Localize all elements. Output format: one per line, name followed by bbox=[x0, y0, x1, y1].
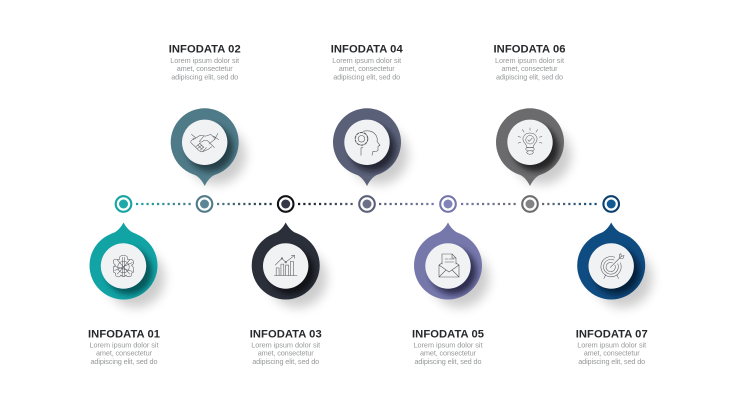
icon: bar chart bbox=[274, 256, 297, 276]
timeline node 5 bbox=[440, 196, 456, 212]
label: infodata 07: amet, consectetur bbox=[584, 349, 640, 358]
label: infodata 04: adipiscing elit, sed do bbox=[333, 72, 400, 82]
label: infodata 05: amet, consectetur bbox=[420, 349, 477, 358]
timeline node 6 bbox=[522, 196, 538, 212]
label: infodata 02: INFODATA 02 bbox=[169, 44, 241, 56]
label: infodata 05: Lorem ipsum dolor sit bbox=[414, 340, 482, 350]
icon: light bulb bbox=[518, 128, 542, 154]
label: infodata 01 bbox=[88, 328, 160, 366]
label: infodata 04: INFODATA 04 bbox=[331, 44, 403, 56]
timeline node 3 bbox=[278, 196, 294, 212]
label: infodata 06: adipiscing elit, sed do bbox=[496, 72, 563, 82]
label: infodata 07: adipiscing elit, sed do bbox=[578, 357, 645, 366]
timeline bbox=[116, 196, 619, 212]
label: infodata 07: INFODATA 07 bbox=[576, 328, 648, 340]
label: infodata 04: amet, consectetur bbox=[339, 64, 395, 73]
timeline node 1 bbox=[116, 196, 131, 212]
timeline node 7 bbox=[603, 196, 619, 212]
pin 5: periwinkle bbox=[414, 222, 489, 308]
label: infodata 01: adipiscing elit, sed do bbox=[90, 357, 158, 366]
label: infodata 02 bbox=[169, 44, 241, 82]
label: infodata 05: adipiscing elit, sed do bbox=[414, 357, 482, 366]
pin 2: slate teal bbox=[171, 108, 246, 186]
label: infodata 04: Lorem ipsum dolor sit bbox=[332, 56, 401, 65]
icon: atom gear bbox=[113, 255, 134, 277]
label: infodata 01: amet, consectetur bbox=[96, 349, 153, 358]
label: infodata 07 bbox=[576, 328, 648, 366]
label: infodata 02: amet, consectetur bbox=[177, 64, 233, 73]
label: infodata 05 bbox=[412, 328, 484, 366]
label: infodata 02: adipiscing elit, sed do bbox=[171, 72, 238, 82]
pin 1: teal bbox=[90, 222, 164, 308]
icon: target bbox=[601, 254, 624, 278]
label: infodata 04 bbox=[331, 44, 403, 82]
label: infodata 03: Lorem ipsum dolor sit bbox=[251, 340, 320, 350]
label: infodata 01: Lorem ipsum dolor sit bbox=[90, 340, 158, 350]
pin 7: navy bbox=[577, 222, 652, 308]
icon: handshake bbox=[191, 134, 219, 152]
label: infodata 05: INFODATA 05 bbox=[412, 328, 484, 340]
timeline node 2 bbox=[197, 196, 212, 212]
label: infodata 07: Lorem ipsum dolor sit bbox=[577, 340, 646, 350]
label: infodata 03: amet, consectetur bbox=[258, 349, 314, 358]
pin 3: charcoal bbox=[252, 222, 327, 308]
label: infodata 06 bbox=[494, 44, 566, 82]
label: infodata 06: amet, consectetur bbox=[502, 64, 558, 73]
label: infodata 06: Lorem ipsum dolor sit bbox=[495, 56, 564, 65]
timeline node 4 bbox=[359, 196, 375, 212]
label: infodata 02: Lorem ipsum dolor sit bbox=[170, 56, 239, 65]
label: infodata 03: INFODATA 03 bbox=[250, 328, 322, 340]
label: infodata 03: adipiscing elit, sed do bbox=[252, 357, 319, 366]
pin 4: slate bbox=[333, 108, 408, 186]
label: infodata 01: INFODATA 01 bbox=[88, 328, 160, 340]
pin 6: grey bbox=[496, 108, 571, 186]
icon: head with gear bbox=[355, 131, 380, 155]
label: infodata 06: INFODATA 06 bbox=[494, 44, 566, 56]
icon: envelope with letter bbox=[439, 254, 459, 277]
label: infodata 03 bbox=[250, 328, 322, 366]
